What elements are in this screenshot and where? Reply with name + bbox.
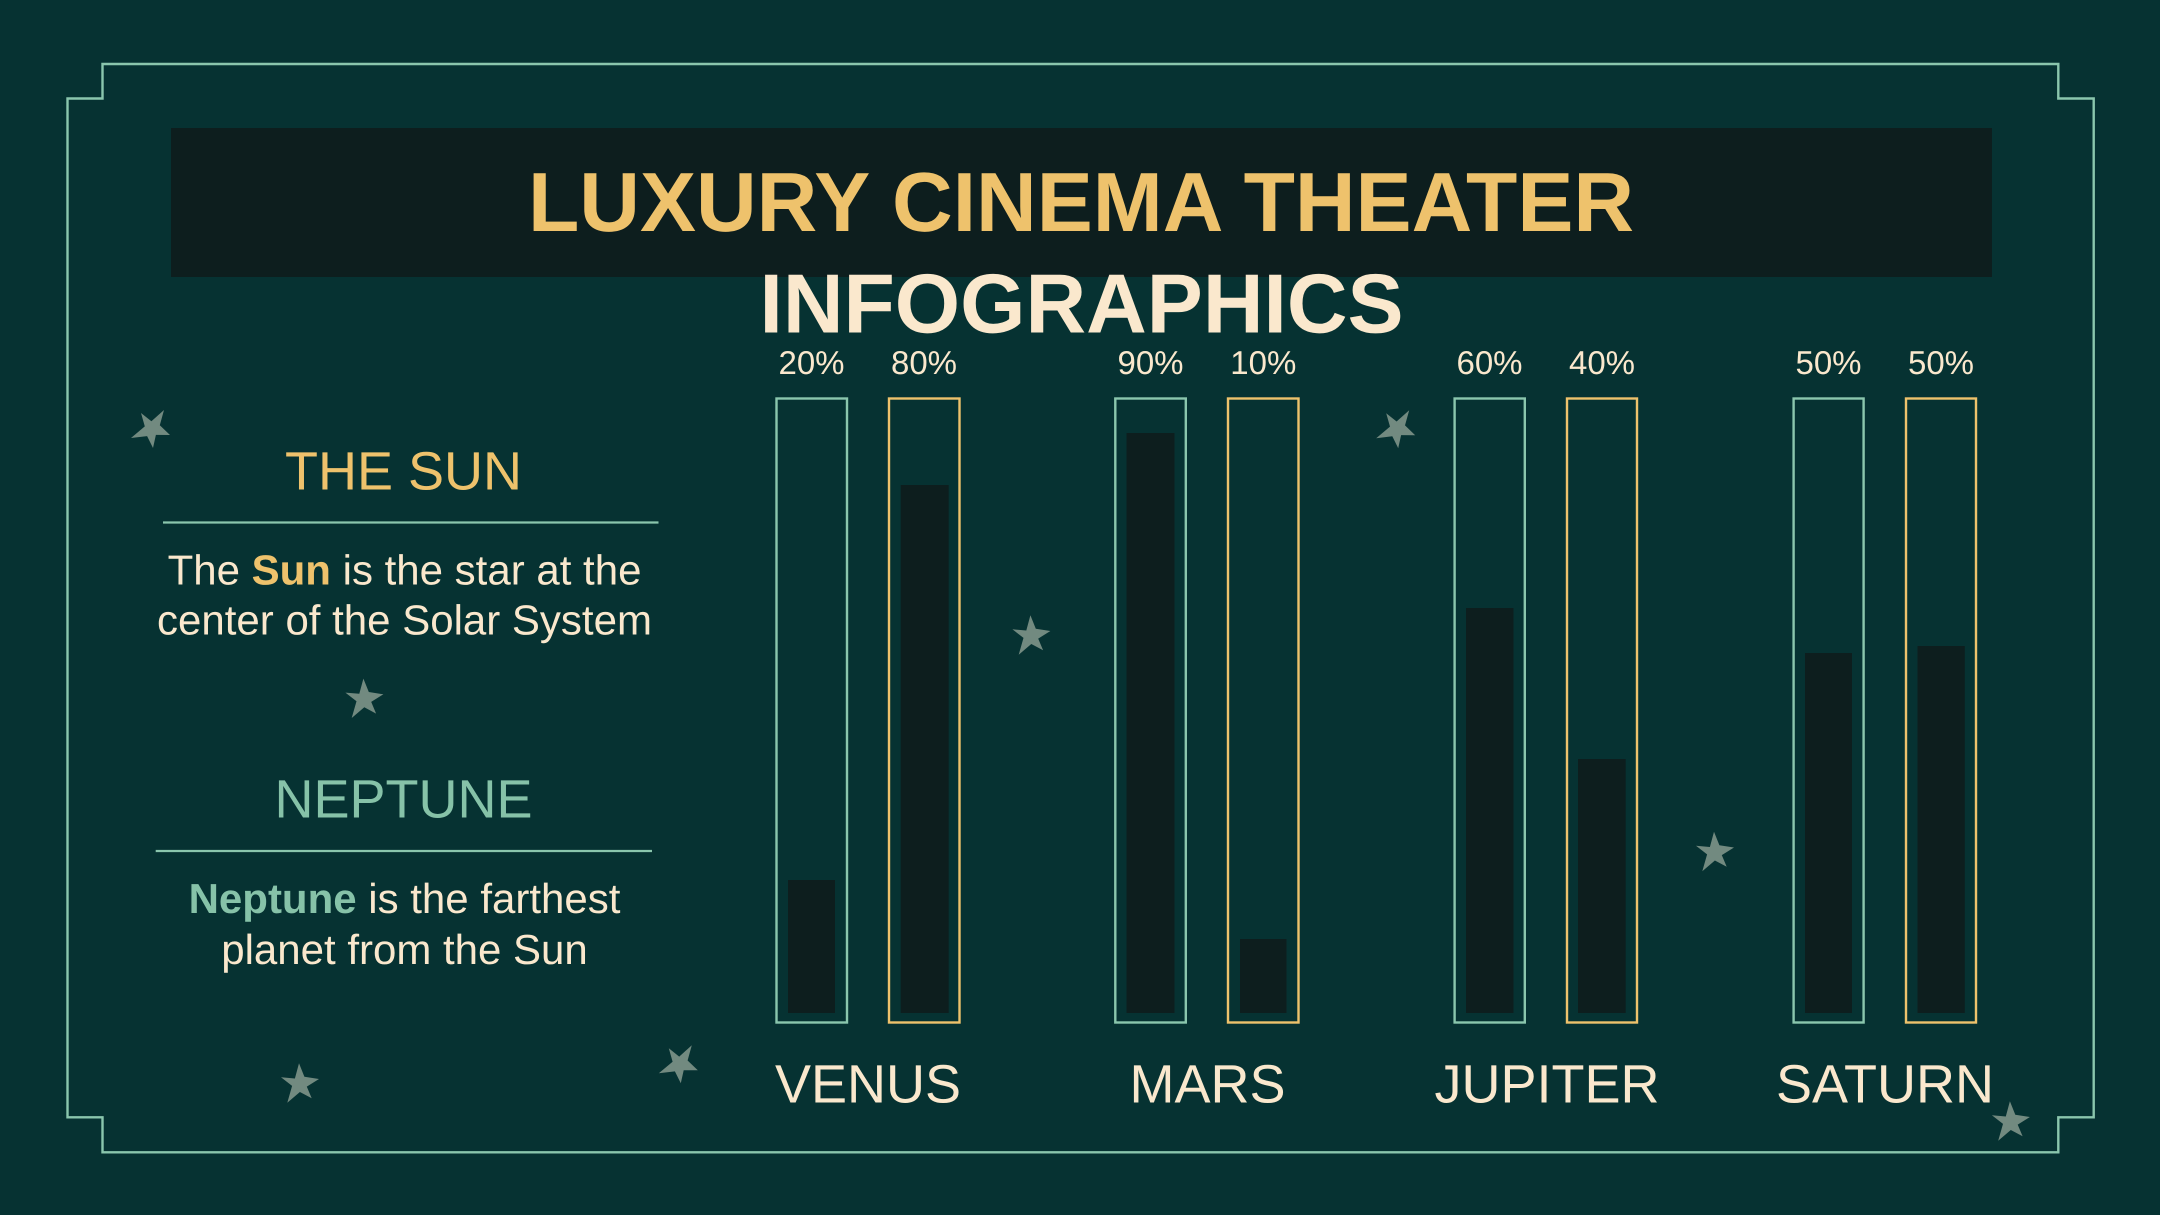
icon: star 4 [659, 1045, 698, 1083]
title: INFOGRAPHICS [759, 256, 1404, 350]
bar group: jupiter: JUPITER [1434, 1055, 1660, 1115]
bar chart [775, 344, 1994, 1115]
text block: sun description: center of the Solar System [157, 596, 652, 643]
icon: star 8 [1992, 1101, 2030, 1141]
bar group: venus [775, 344, 961, 1115]
icon: star 5 [1012, 615, 1050, 655]
title band [171, 128, 1992, 277]
bar group: venus: VENUS [775, 1055, 961, 1115]
bar group: venus: 20% [778, 344, 845, 381]
bar group: saturn: SATURN [1776, 1055, 1994, 1115]
bar group: saturn: 50% [1795, 344, 1862, 381]
icon: star 3 [281, 1063, 319, 1103]
panel: neptune [156, 770, 652, 973]
text block: neptune description [189, 875, 621, 973]
bar group: jupiter: 60% [1456, 344, 1523, 381]
bar group: jupiter: 40% [1569, 344, 1635, 381]
heading: the sun: THE SUN [285, 442, 522, 502]
icon: star 1 [131, 410, 170, 448]
bar group: jupiter [1434, 344, 1660, 1115]
bar group: saturn: 50% [1908, 344, 1974, 381]
bar group: mars: 10% [1230, 344, 1296, 381]
icon: star 7 [1696, 832, 1734, 871]
panel: the sun [157, 442, 658, 643]
bar group: mars: 90% [1117, 344, 1184, 381]
text block: sun description: The Sun is the star at the [168, 546, 641, 593]
heading: neptune: NEPTUNE [274, 770, 533, 830]
icon: star 6 [1376, 410, 1415, 448]
bar group: venus: 80% [891, 344, 957, 381]
text block: sun description [157, 546, 652, 643]
title: LUXURY CINEMA THEATER [528, 155, 1634, 249]
text block: neptune description: Neptune is the farthest [189, 875, 621, 922]
title [528, 155, 1634, 350]
bar group: saturn [1776, 344, 1994, 1115]
bar group: mars [1115, 344, 1298, 1115]
icon: star 2 [345, 679, 383, 718]
bar group: mars: MARS [1129, 1055, 1286, 1115]
text block: neptune description: planet from the Sun [221, 926, 588, 973]
